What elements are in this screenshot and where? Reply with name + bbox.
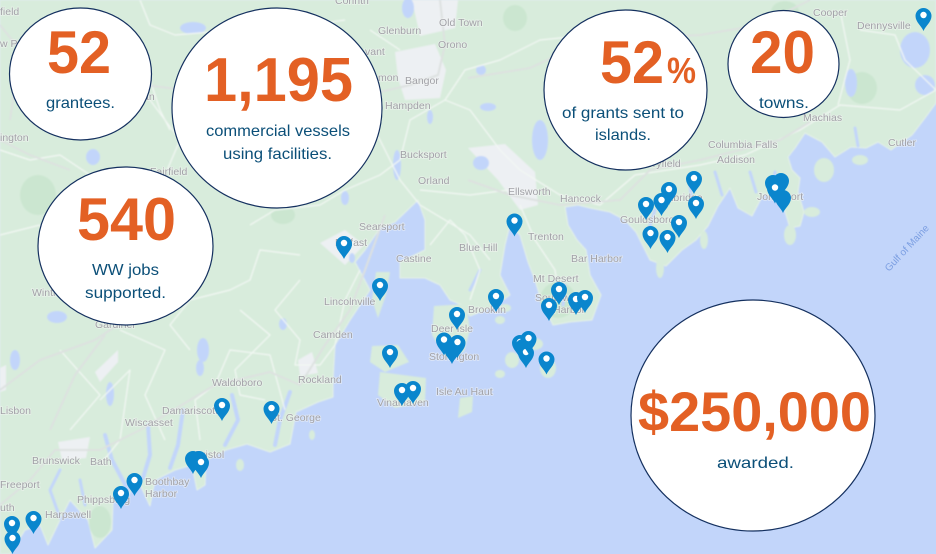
map: place labels: Gardiner bbox=[95, 319, 136, 331]
stat number: 52%: % bbox=[667, 50, 696, 91]
pin: Southwest Harbor bbox=[541, 298, 557, 321]
pin: Steuben bbox=[671, 215, 687, 238]
map: place labels: Brunswick bbox=[32, 455, 81, 467]
map: place labels: Bar Harbor bbox=[571, 253, 623, 265]
pin: Damariscotta bbox=[214, 398, 230, 421]
map: lakes bbox=[10, 0, 935, 406]
map: place labels: Belfast bbox=[335, 237, 367, 249]
stat circle: 52% grants sent to islands bbox=[544, 10, 707, 170]
pin: Stonington 1 bbox=[444, 341, 460, 364]
map: place labels: w P bbox=[0, 38, 18, 50]
map: place labels: vant bbox=[365, 46, 385, 58]
map: place labels: Machias bbox=[803, 112, 842, 124]
pin: Winter Harbor bbox=[642, 226, 658, 249]
map: place labels: Brooklin bbox=[468, 304, 506, 316]
map: place labels: Bucksport bbox=[400, 149, 447, 161]
map: place labels: Blue Hill bbox=[459, 242, 498, 254]
map: place labels: Orono bbox=[438, 39, 467, 51]
pin: Seal Harbor bbox=[568, 292, 584, 315]
map: place labels: Old Town bbox=[439, 17, 483, 29]
map: place labels: Orland bbox=[418, 175, 450, 187]
pin: Gouldsboro 3 bbox=[654, 193, 670, 216]
map: place labels: Lisbon bbox=[0, 405, 31, 417]
pin: Blue Hill Bay bbox=[506, 214, 522, 236]
map: place labels: Addison bbox=[717, 154, 755, 166]
stat number: 540: 540 bbox=[77, 186, 176, 253]
map: place labels: mon bbox=[378, 72, 399, 84]
stat circle: $250,000 awarded bbox=[631, 300, 875, 531]
stat number: 20: 20 bbox=[750, 19, 815, 86]
map: place labels: Phippsburg bbox=[77, 494, 130, 506]
map: place labels: Harbor bbox=[553, 304, 586, 316]
stat circle: 52 grantees bbox=[10, 8, 152, 140]
stat caption: awarded: awarded. bbox=[717, 455, 794, 472]
map: place labels: Lincolnville bbox=[324, 296, 376, 308]
pin: Cherryfield bbox=[686, 171, 702, 194]
map: place labels: Winthrop bbox=[32, 287, 74, 299]
pin cluster: Jonesport bbox=[765, 173, 791, 213]
stat caption: towns: towns. bbox=[759, 95, 809, 112]
map: place labels: Harbor bbox=[145, 488, 178, 500]
pin: Vinalhaven 1 bbox=[405, 381, 421, 404]
map: place labels: Waldoboro bbox=[212, 377, 263, 389]
pin: Gouldsboro 1 bbox=[661, 182, 677, 205]
stat caption: WW jobs supported: WW jobs bbox=[92, 262, 159, 279]
map: place labels: Glenburn bbox=[378, 25, 421, 37]
pin: Harpswell bbox=[26, 511, 42, 534]
map: place labels: Camden bbox=[313, 329, 353, 341]
map: place labels: uth bbox=[0, 502, 15, 514]
map: islands bbox=[236, 155, 868, 471]
pin: St. George bbox=[264, 401, 280, 424]
map: river estuaries and inlets bbox=[50, 128, 858, 518]
stat number: $250,000: $250,000 bbox=[638, 380, 871, 443]
map: place labels: Milbridge bbox=[660, 192, 703, 204]
map: place labels: Cooper bbox=[813, 7, 848, 19]
map: place labels: Stonington bbox=[429, 351, 479, 363]
map: place labels: Hancock bbox=[560, 193, 602, 205]
pin: Mount Desert bbox=[551, 282, 567, 305]
stat circle: 20 towns bbox=[728, 10, 839, 118]
stat circle: 540 WW jobs bbox=[38, 167, 213, 325]
map: place labels: ington bbox=[0, 132, 29, 144]
map: place labels: Castine bbox=[396, 253, 432, 265]
pin: Portland area bbox=[4, 531, 20, 554]
stat caption: commercial vessels using facilities: commercial vessels bbox=[206, 123, 350, 140]
map: highways bbox=[0, 0, 810, 505]
map: place labels: an bbox=[143, 91, 155, 103]
stat caption: grantees: grantees. bbox=[46, 95, 115, 112]
pin: Islesboro bbox=[372, 278, 388, 301]
stat number: 1,195: 1,195 bbox=[204, 46, 353, 115]
pin: Stonington 2 bbox=[450, 335, 466, 358]
pin: Stonington 3 bbox=[436, 332, 452, 356]
stat caption: commercial vessels using facilities: using facilities. bbox=[223, 146, 332, 163]
map: place labels: Wiscasset bbox=[125, 417, 173, 429]
stat number: 52: 52 bbox=[47, 19, 111, 86]
map: place labels: Fairfield bbox=[150, 166, 188, 178]
map: urban areas bbox=[0, 0, 538, 460]
map: place labels: St. George bbox=[270, 412, 321, 424]
pin: Boothbay bbox=[126, 473, 142, 496]
map: place labels: Mt Desert bbox=[533, 273, 579, 285]
pin: Frenchboro bbox=[538, 352, 554, 374]
map: place labels: Isle Au Haut bbox=[436, 386, 493, 398]
map: place labels: Bangor bbox=[405, 75, 439, 87]
pin: North Haven bbox=[382, 345, 398, 368]
stat caption: WW jobs supported: supported. bbox=[85, 285, 166, 302]
pin: Milbridge bbox=[688, 196, 704, 219]
pin: Phippsburg bbox=[113, 486, 129, 509]
map: place labels: Damariscotta bbox=[162, 405, 224, 417]
pin: Prospect Harbor bbox=[660, 230, 676, 253]
map: place labels: Gouldsboro bbox=[620, 214, 674, 226]
map: place labels: Bristol bbox=[195, 449, 224, 461]
map: place labels: Vinalhaven bbox=[377, 397, 429, 409]
stat caption: of grants sent to islands: islands. bbox=[595, 127, 651, 144]
pin: Gouldsboro 2 bbox=[638, 197, 654, 220]
pin: Northeast Harbor bbox=[577, 290, 593, 313]
pin: Dennysville area bbox=[916, 8, 932, 31]
map: place labels: Southwest bbox=[535, 292, 584, 304]
map label: Gulf of Maine: Gulf of Maine bbox=[883, 223, 932, 274]
map: place labels: Searsport bbox=[359, 221, 405, 233]
map: place labels: Rockland bbox=[298, 374, 342, 386]
map: place labels: Ellsworth bbox=[508, 186, 551, 198]
map: place labels: Columbia Falls bbox=[708, 139, 777, 151]
map: place labels: Boothbay bbox=[145, 476, 190, 488]
map: place labels: Cutler bbox=[888, 137, 917, 149]
pin: Belfast bbox=[336, 236, 352, 259]
map: place labels: Cherryfield bbox=[630, 158, 681, 170]
map: place labels: Jonesport bbox=[757, 191, 803, 203]
map: place labels: Hampden bbox=[385, 100, 431, 112]
stat circle: 1,195 commercial vessels bbox=[172, 8, 382, 208]
map: place labels: Trenton bbox=[528, 231, 564, 243]
map: place labels: Deer Isle bbox=[431, 323, 473, 335]
pin cluster: Bristol bbox=[185, 451, 209, 478]
map: place labels: Freeport bbox=[0, 479, 40, 491]
pin: Brooklin bbox=[488, 289, 504, 312]
map: place labels: Harpswell bbox=[45, 509, 91, 521]
pin cluster: Swans Island bbox=[512, 331, 536, 368]
map: place labels: Bath bbox=[90, 456, 112, 468]
stat number: 52%: 52 bbox=[600, 29, 664, 96]
stat caption: of grants sent to islands: of grants sent to bbox=[562, 105, 684, 122]
pin: Vinalhaven 2 bbox=[394, 383, 410, 406]
pin: Falmouth area bbox=[4, 516, 20, 539]
map: place labels: field bbox=[0, 6, 19, 18]
pin: Deer Isle bbox=[449, 307, 465, 330]
map: place labels: Dennysville bbox=[857, 20, 911, 32]
